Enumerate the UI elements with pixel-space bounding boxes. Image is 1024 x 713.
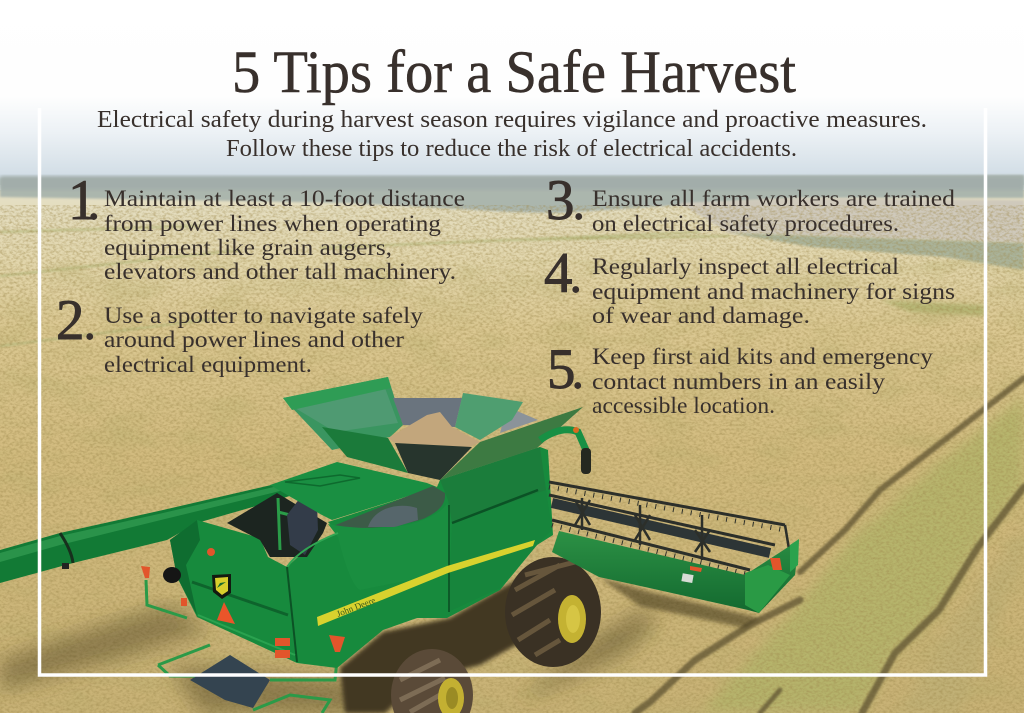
tire tracks: [635, 378, 1024, 713]
tip 4: [544, 242, 955, 328]
front drive tire: [505, 557, 601, 667]
mirror arm: [540, 427, 591, 474]
tip 3: [546, 169, 956, 236]
tip 1: equipment like grain augers,: [104, 235, 392, 260]
combine harvester: [0, 377, 799, 713]
tip 5: Keep first aid kits and emergency: [592, 344, 934, 369]
tip 2: 2.: [56, 289, 96, 352]
tip 5: [547, 338, 934, 418]
tail lights: [141, 548, 345, 658]
lower tank side panel: [448, 490, 552, 612]
top deck: [270, 462, 437, 520]
tip 2: Use a spotter to navigate safely: [104, 303, 424, 328]
tip 4: 4.: [544, 242, 582, 305]
intro text: Electrical safety during harvest season requires vigilance and proactive measures.: [97, 107, 927, 133]
tip 1: 1.: [68, 169, 100, 232]
tip 2: electrical equipment.: [104, 352, 312, 377]
header body: [552, 531, 799, 613]
tip 3: Ensure all farm workers are trained: [592, 186, 956, 211]
tip 5: 5.: [547, 338, 584, 401]
tip 3: on electrical safety procedures.: [592, 211, 899, 236]
yellow stripe with brand name: [317, 540, 535, 626]
green crop strip: [700, 395, 1024, 713]
upper tank side panel: [440, 447, 546, 523]
grain mound: [388, 412, 480, 447]
curved side panel: [328, 503, 450, 590]
intro text: Follow these tips to reduce the risk of electrical accidents.: [226, 136, 797, 162]
rear platform and step: [146, 580, 338, 713]
tip 5: accessible location.: [592, 393, 775, 418]
grain header: [549, 482, 799, 613]
side opening with cooling fan: [333, 486, 445, 528]
tip 4: Regularly inspect all electrical: [592, 254, 899, 279]
tip 1: from power lines when operating: [104, 211, 442, 236]
machine body: [141, 447, 553, 668]
header reel: [549, 482, 790, 575]
grain tank with open lids: [283, 377, 583, 480]
tip 4: equipment and machinery for signs: [592, 279, 955, 304]
grain auger: [0, 470, 340, 583]
shadow beneath machine: [340, 575, 525, 713]
funnel: [395, 443, 472, 480]
tip 1: Maintain at least a 10-foot distance: [104, 186, 465, 211]
left lid: [283, 377, 403, 450]
tip 2: around power lines and other: [104, 327, 404, 352]
right flap: [440, 407, 583, 480]
tip 1: [68, 169, 465, 284]
tip 2: [56, 289, 424, 377]
yellow stripe with brand name: John Deere: [335, 595, 377, 619]
tip 4: of wear and damage.: [592, 303, 810, 328]
left flap: [322, 427, 408, 473]
title: 5 Tips for a Safe Harvest: [232, 39, 796, 105]
intro text: [97, 107, 927, 162]
tarp: [393, 398, 462, 427]
right lid: [455, 393, 523, 440]
tip 5: contact numbers in an easily: [592, 369, 886, 394]
safety triangle: [217, 602, 235, 624]
deer logo badge: [212, 574, 231, 599]
white frame: [40, 108, 986, 675]
tip 3: 3.: [546, 169, 585, 232]
distant fallow field: [679, 198, 1024, 243]
ground shadows: [0, 605, 660, 713]
rear tire: [391, 649, 473, 713]
tip 1: elevators and other tall machinery.: [104, 259, 456, 284]
engine compartment: [227, 493, 327, 557]
